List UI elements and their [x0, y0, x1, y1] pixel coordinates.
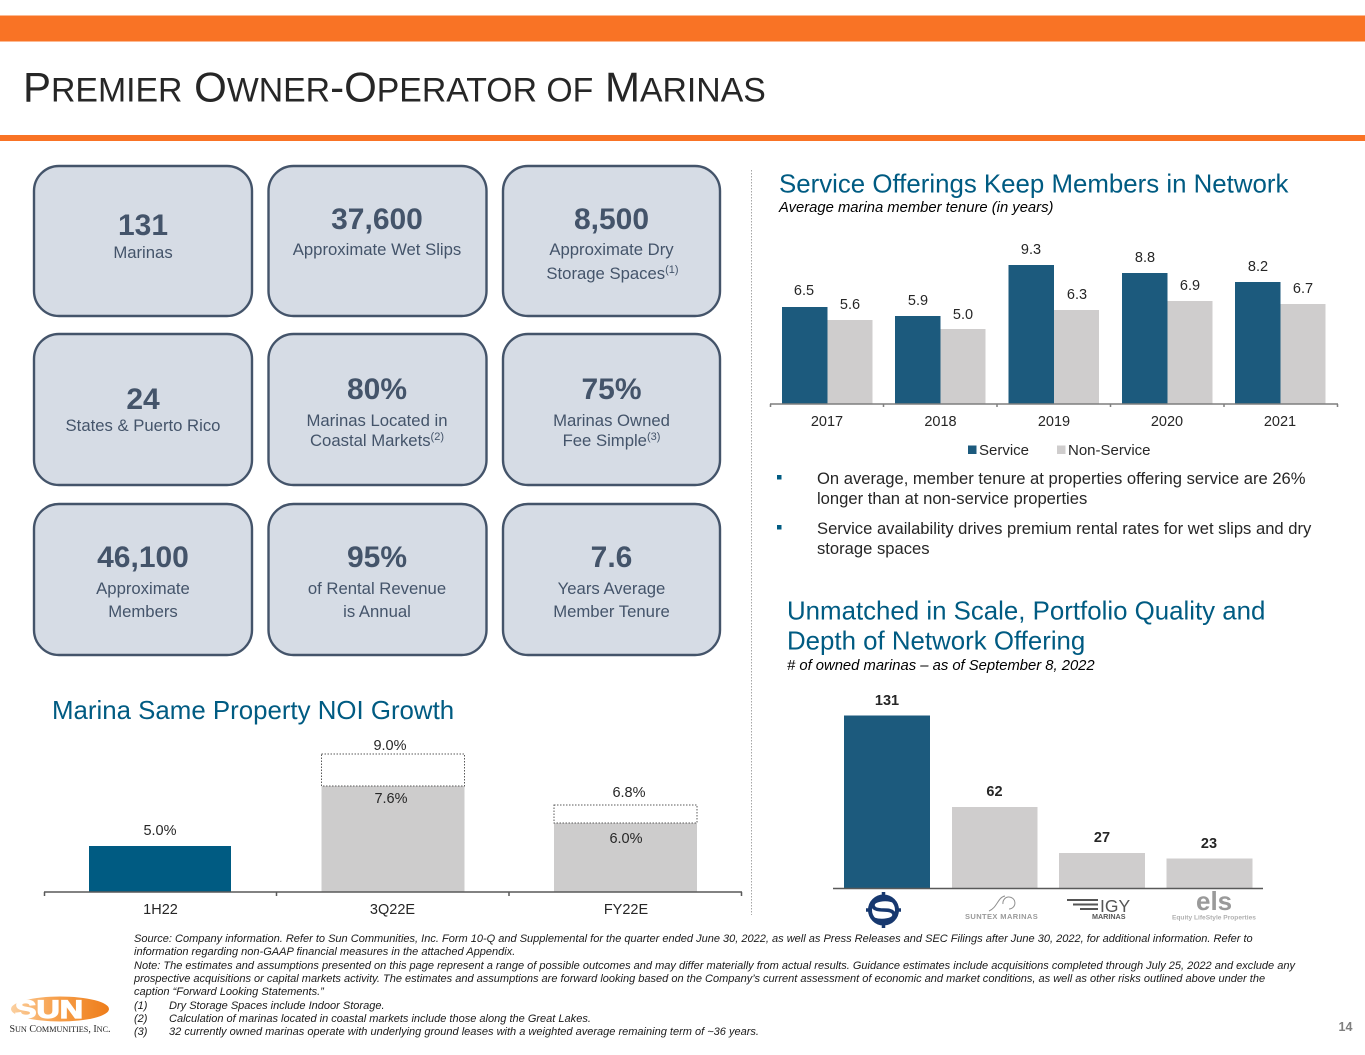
chart: member tenure: 6.5	[794, 283, 814, 299]
heading: unmatched in scale: Unmatched in Scale, Portfolio Quality and	[787, 598, 1265, 626]
stat: 46,100 members	[34, 504, 252, 655]
footnotes: 32 currently owned marinas operate with underlying ground leases with a weighted average remaining term of ~36 years.	[169, 1026, 759, 1038]
chart: NOI growth: 6.8%	[612, 785, 646, 801]
logo: Equity LifeStyle Properties	[1172, 886, 1256, 922]
stat: 75% fee simple	[503, 334, 720, 485]
footnotes: (3)	[134, 1026, 148, 1038]
logo: IGY Marinas: IGY	[1100, 896, 1130, 916]
stat: 24 states	[34, 334, 252, 485]
footnotes: (2)	[134, 1013, 148, 1025]
stat: 46,100 members: Approximate	[96, 579, 190, 598]
chart: member tenure: 5.6	[840, 297, 860, 313]
chart: owned marinas	[833, 693, 1263, 888]
chart: NOI growth: 1H22	[143, 902, 178, 918]
stat: 80% coastal: 80%	[347, 373, 407, 406]
stat: 75% fee simple: 75%	[581, 373, 642, 406]
stat: 95% annual revenue	[268, 504, 486, 655]
chart: owned marinas: 27	[1094, 830, 1110, 846]
legend: Non-Service	[1068, 442, 1151, 459]
subheading: tenure: Average marina member tenure (in years)	[778, 200, 1053, 216]
stat: 131 marinas: Marinas	[113, 243, 173, 262]
stat: 24 states: States & Puerto Rico	[66, 416, 220, 435]
stat: 80% coastal	[268, 334, 486, 485]
chart: member tenure: 8.8	[1135, 250, 1155, 266]
logo: Suntex Marinas: SUNTEX MARINAS	[965, 912, 1038, 921]
chart: owned marinas: 23	[1201, 836, 1217, 852]
stat: 95% annual revenue: 95%	[347, 541, 407, 574]
logo: IGY Marinas: MARINAS	[1092, 912, 1126, 921]
chart: member tenure: 6.9	[1180, 278, 1200, 294]
stat: 7.6 years tenure: Years Average	[558, 579, 665, 598]
stat: 46,100 members: 46,100	[97, 541, 189, 574]
footnotes: Dry Storage Spaces include Indoor Storage.	[169, 1000, 385, 1012]
footnotes: Note: The estimates and assumptions presented on this page represent a range of possible outcomes and may differ materially from actual results. Guidance estimates include acquisitions completed through July 25, 2022 and exclude any	[134, 960, 1296, 972]
stat: 80% coastal: Coastal Markets	[310, 431, 431, 450]
chart: NOI growth: 7.6%	[374, 791, 408, 807]
stat: 8,500 dry storage: Storage Spaces	[546, 264, 665, 283]
stat: 37,600 wet slips: 37,600	[331, 203, 423, 236]
chart: owned marinas: 131	[875, 693, 899, 709]
stat: 24 states: 24	[126, 383, 160, 416]
stat: 75% fee simple: Fee Simple	[563, 431, 647, 450]
footnotes	[133, 933, 1296, 1038]
logo: Equity LifeStyle Properties: els	[1196, 886, 1232, 916]
logo: Sun Communities: SUN	[15, 996, 83, 1024]
logo: Safe Harbor	[866, 892, 901, 928]
logo: Suntex Marinas	[965, 896, 1038, 921]
stat: 37,600 wet slips	[268, 166, 486, 316]
chart: member tenure: 2018	[924, 414, 957, 430]
stat: 131 marinas	[34, 166, 252, 316]
heading: unmatched in scale: Depth of Network Offering	[787, 628, 1085, 656]
chart: member tenure: 6.7	[1293, 281, 1313, 297]
stat: 95% annual revenue: is Annual	[343, 602, 411, 621]
stat: 95% annual revenue: of Rental Revenue	[308, 579, 446, 598]
heading: unmatched in scale	[787, 598, 1265, 656]
legend: Service	[979, 442, 1029, 459]
chart: member tenure: 2020	[1151, 414, 1183, 430]
heading: service offerings: Service Offerings Keep Members in Network	[779, 170, 1288, 198]
chart: member tenure: 6.3	[1067, 287, 1087, 303]
chart: NOI growth: 3Q22E	[370, 902, 415, 918]
page number: 14	[1338, 1020, 1352, 1034]
stat: 7.6 years tenure: 7.6	[591, 541, 632, 574]
legend	[968, 442, 1151, 459]
chart: member tenure: 8.2	[1248, 259, 1268, 275]
chart: member tenure: 9.3	[1021, 242, 1041, 258]
stat: 7.6 years tenure	[503, 504, 720, 655]
chart: NOI growth: 5.0%	[143, 823, 177, 839]
stat: 37,600 wet slips: Approximate Wet Slips	[293, 240, 461, 259]
footnotes: caption “Forward Looking Statements.”	[134, 986, 325, 998]
footnotes: information regarding non-GAAP financial measures in the attached Appendix.	[134, 946, 515, 958]
title underline band	[0, 135, 1365, 141]
logo: IGY Marinas	[1067, 896, 1130, 921]
chart: NOI growth	[44, 738, 742, 918]
chart: owned marinas: 62	[986, 784, 1003, 800]
footnotes: Source: Company information. Refer to Sun Communities, Inc. Form 10-Q and Supplemental for the quarter ended June 30, 2022, as well as Press Releases and SEC Filings after June 30, 2022, for additional information. Refer to	[134, 933, 1253, 945]
logo: Sun Communities: SUN COMMUNITIES, INC.	[9, 1024, 111, 1035]
bullet text: Service availability drives premium rental rates for wet slips and dry	[817, 519, 1312, 538]
logo: Sun Communities	[9, 996, 111, 1035]
chart: member tenure: 5.0	[953, 307, 973, 323]
stat: 8,500 dry storage: 8,500	[574, 203, 649, 236]
heading: NOI growth: Marina Same Property NOI Growth	[52, 697, 454, 725]
chart: member tenure: 2017	[811, 414, 843, 430]
chart: member tenure: 5.9	[908, 293, 928, 309]
stat: 8,500 dry storage: Approximate Dry	[549, 240, 674, 259]
top orange band	[0, 16, 1365, 42]
footnotes: (1)	[134, 1000, 148, 1012]
chart: NOI growth: 9.0%	[373, 738, 407, 754]
footnotes: prospective acquisitions or capital markets activity. The estimates and assumptions are forward looking based on the Company’s current assessment of economic and market conditions, as well as other risks outlined above under the	[133, 973, 1265, 985]
stat: 46,100 members: Members	[108, 602, 178, 621]
bullet text	[777, 469, 1312, 558]
stat: 131 marinas: 131	[118, 209, 168, 242]
chart: member tenure: 2021	[1264, 414, 1296, 430]
bullet text: storage spaces	[817, 539, 930, 558]
stat: 8,500 dry storage	[503, 166, 720, 316]
bullet text: On average, member tenure at properties offering service are 26%	[817, 469, 1306, 488]
chart: NOI growth: 6.0%	[609, 831, 643, 847]
logo: Equity LifeStyle Properties: Equity LifeStyle Properties	[1172, 914, 1256, 922]
chart: NOI growth: FY22E	[604, 902, 648, 918]
footnotes: Calculation of marinas located in coastal markets include those along the Great Lakes.	[169, 1013, 591, 1025]
bullet text: longer than at non-service properties	[817, 489, 1087, 508]
panel: key statistics	[34, 166, 720, 655]
chart: member tenure	[770, 242, 1338, 430]
stat: 8,500 dry storage: (1)	[665, 264, 679, 276]
stat: 7.6 years tenure: Member Tenure	[553, 602, 670, 621]
stat: 75% fee simple: Marinas Owned	[553, 411, 670, 430]
stat: 80% coastal: (2)	[431, 431, 444, 443]
stat: 80% coastal: Marinas Located in	[306, 411, 448, 430]
chart: member tenure: 2019	[1038, 414, 1070, 430]
title: PREMIER OWNER-OPERATOR OF MARINAS	[23, 64, 766, 110]
stat: 75% fee simple: (3)	[647, 431, 660, 443]
subheading: owned marinas: # of owned marinas – as of September 8, 2022	[787, 658, 1095, 674]
